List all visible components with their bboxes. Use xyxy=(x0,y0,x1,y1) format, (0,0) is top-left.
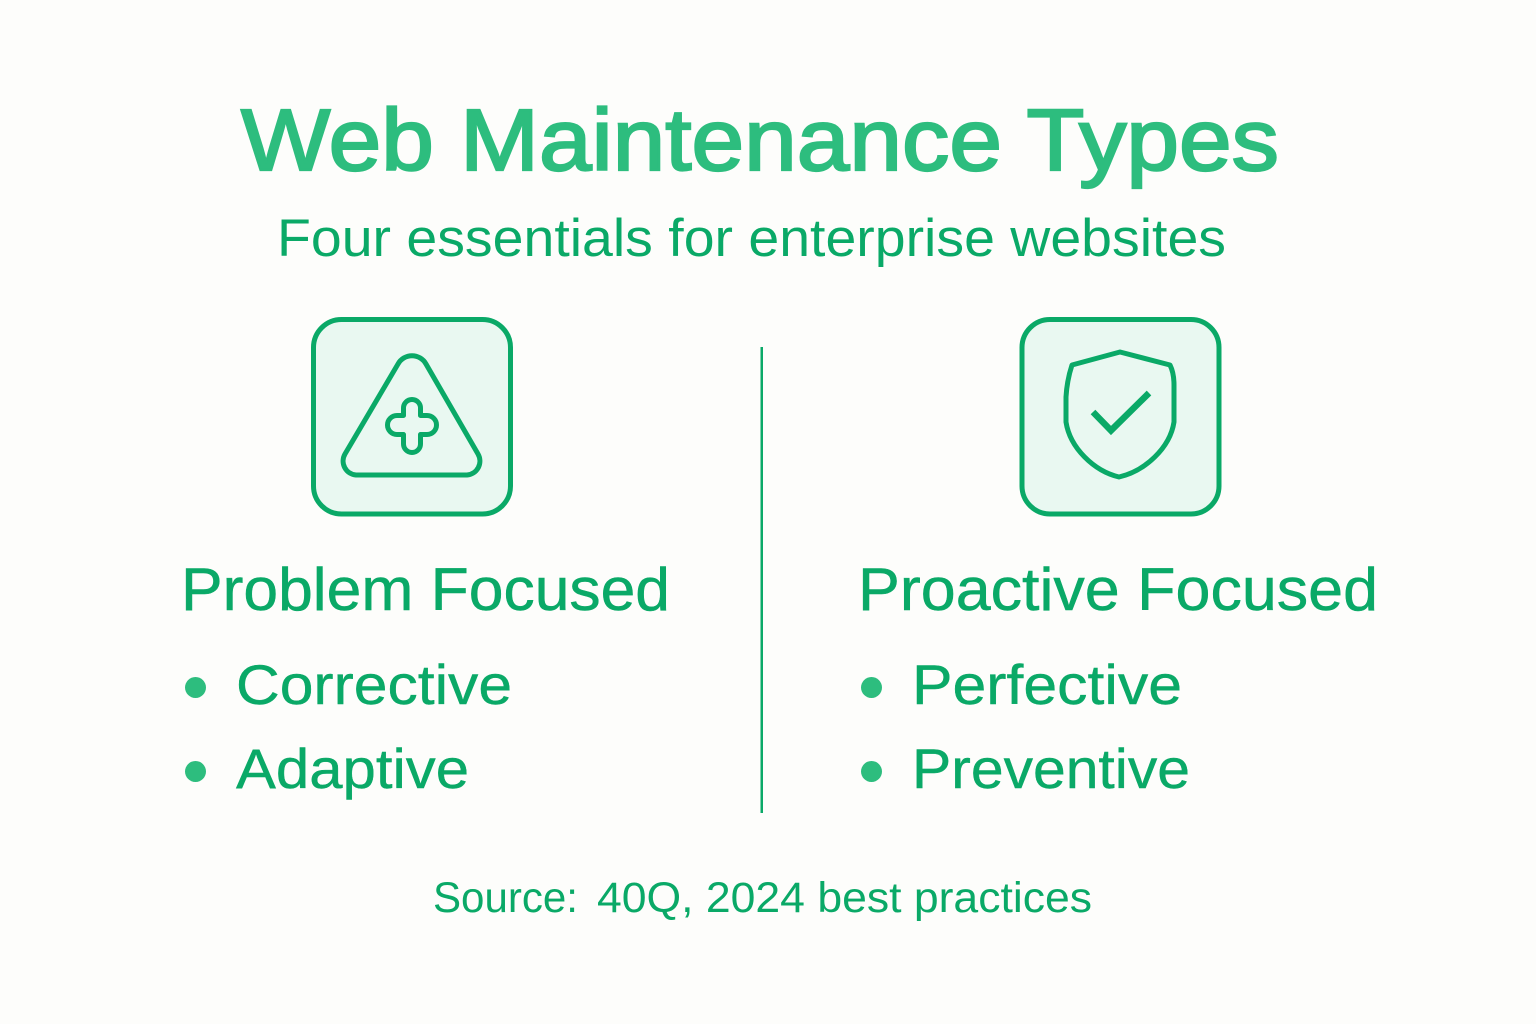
left column heading: Problem Focused xyxy=(181,556,670,623)
icon: triangle with medical cross xyxy=(314,320,510,514)
source note: 40Q, 2024 best practices xyxy=(597,874,1092,922)
right list: Perfective: Perfective xyxy=(912,653,1182,716)
icon: shield with check mark xyxy=(1022,320,1219,514)
subtitle: Four essentials for enterprise websites xyxy=(277,209,1226,268)
right column heading: Proactive Focused xyxy=(858,556,1378,623)
right list: Preventive: Preventive xyxy=(912,737,1190,800)
title: Web Maintenance Types xyxy=(241,92,1279,189)
left list: Adaptive: Adaptive xyxy=(236,737,469,800)
left list: Corrective: Corrective xyxy=(236,653,512,716)
source note: Source: xyxy=(433,874,578,922)
vertical divider xyxy=(760,347,763,813)
